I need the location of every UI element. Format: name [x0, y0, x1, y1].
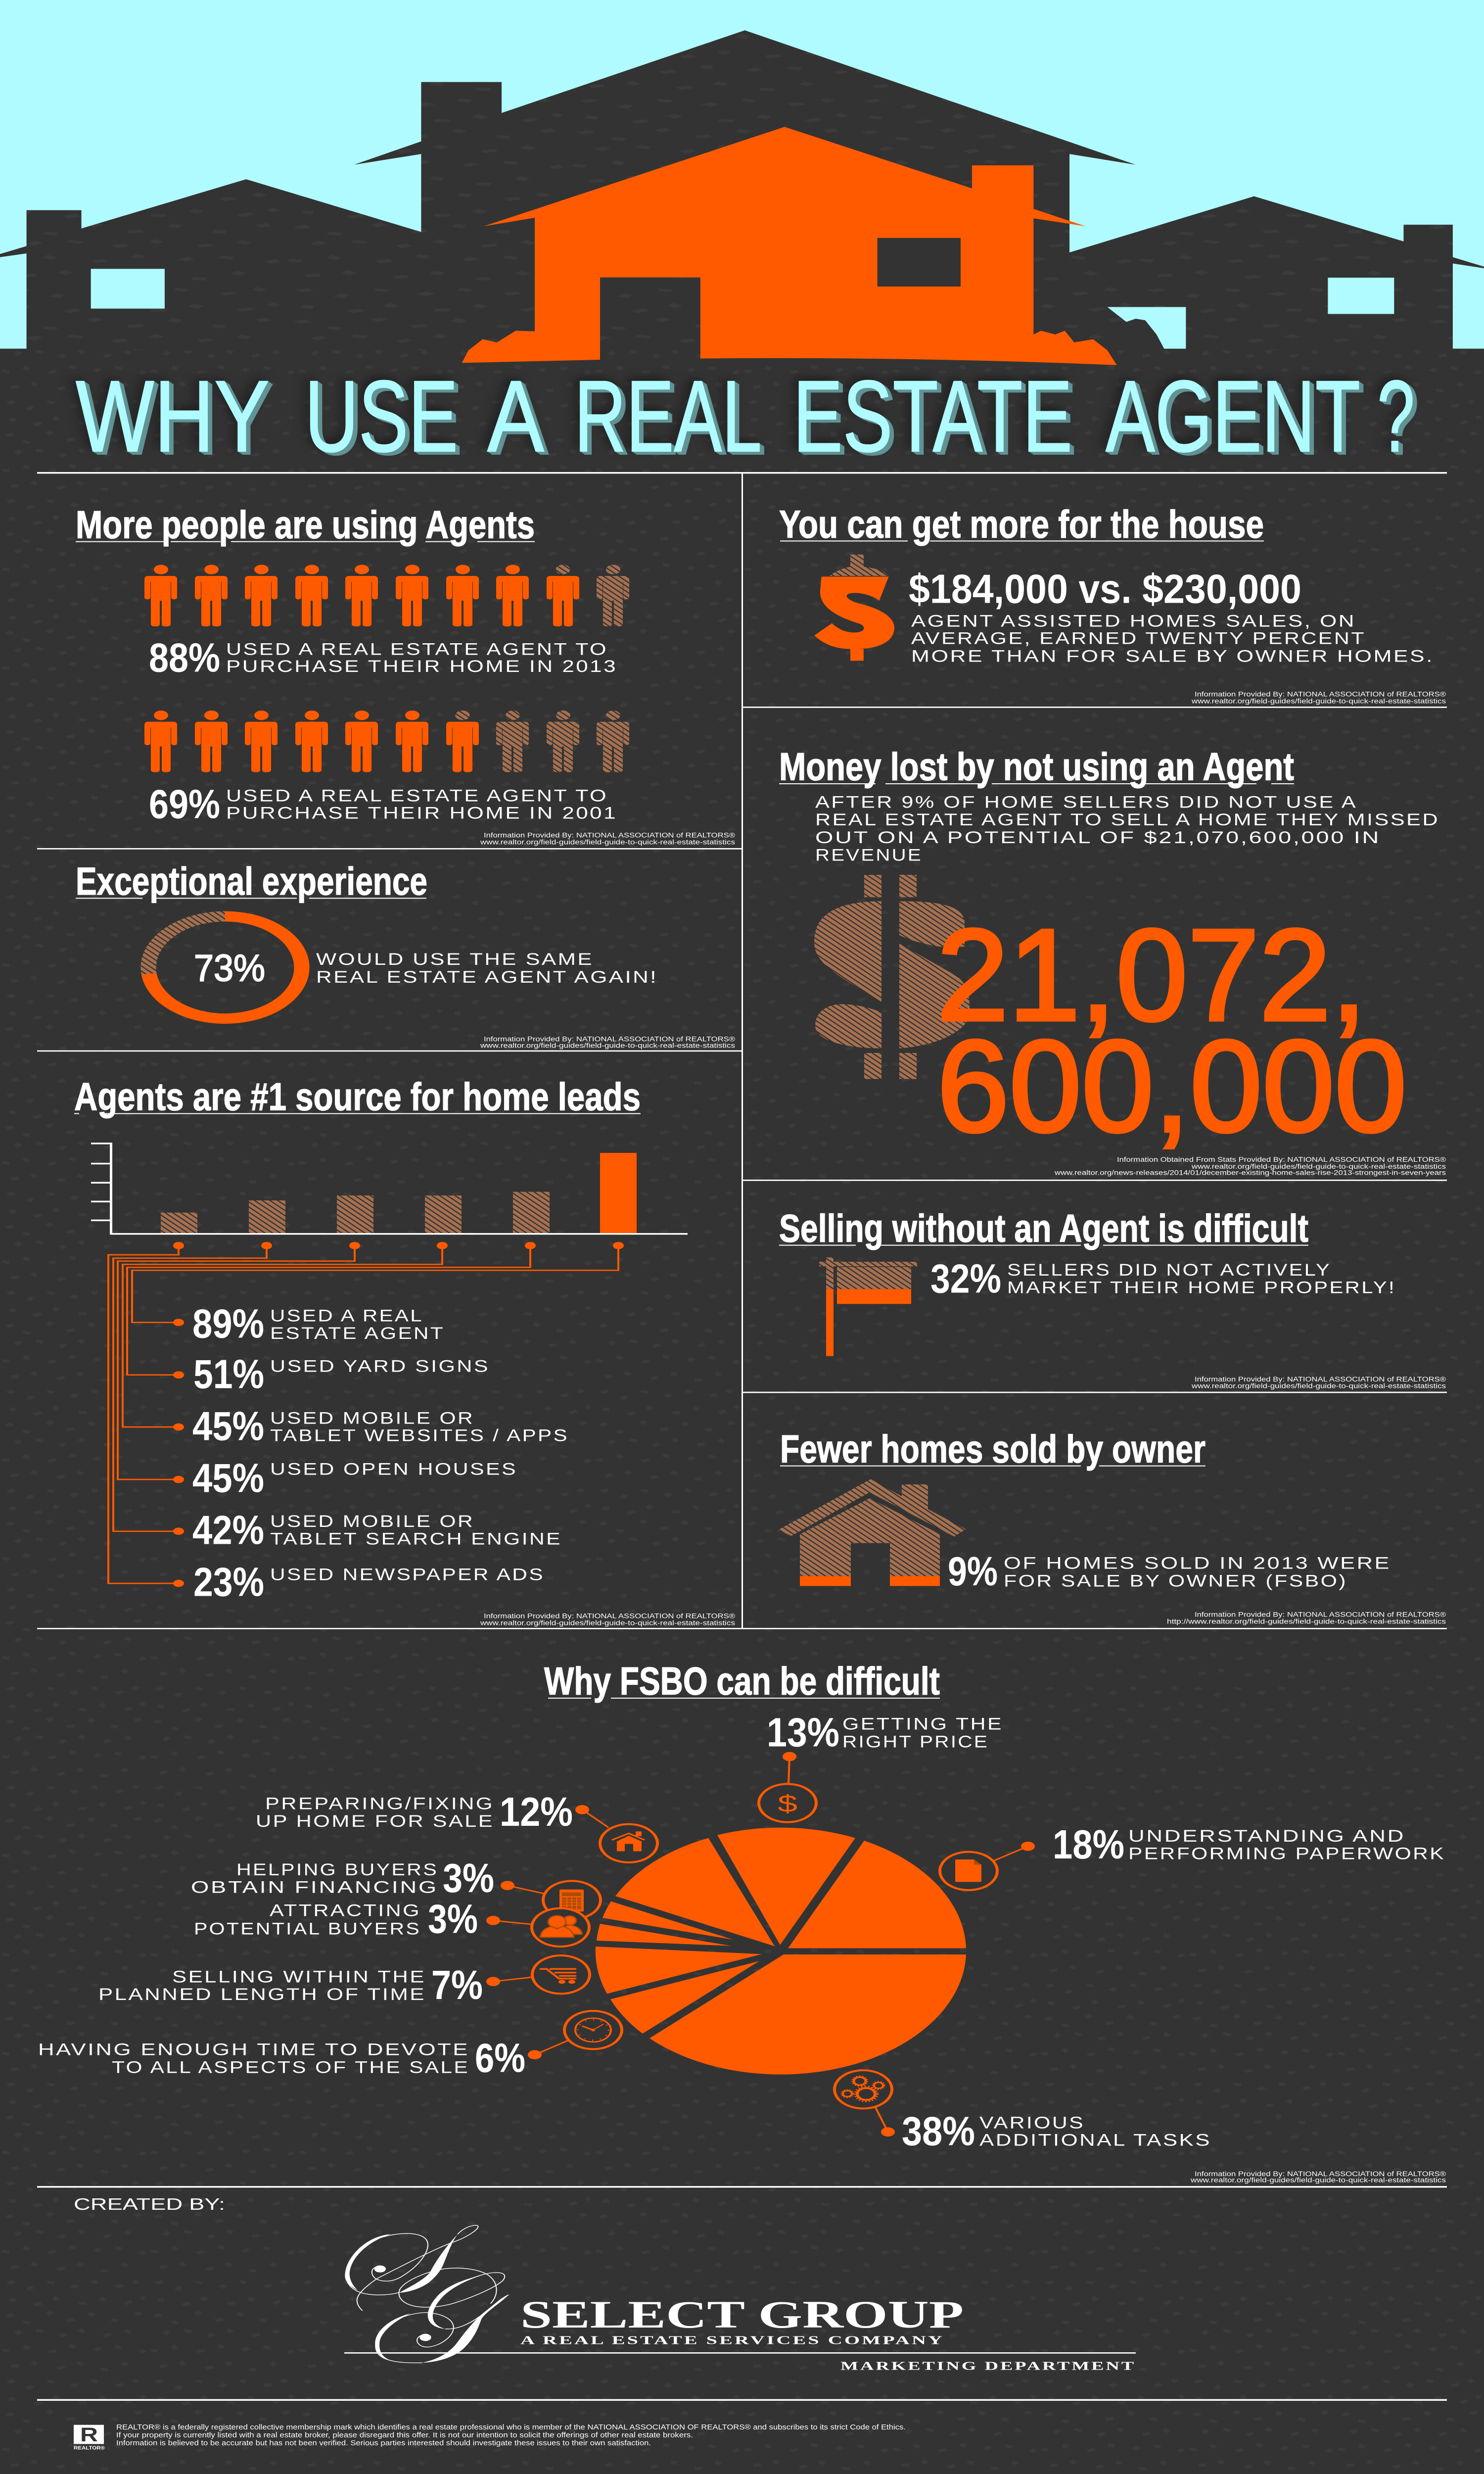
logo: select group	[344, 2225, 1136, 2373]
callout: people icon	[486, 1908, 589, 1947]
label: 7 percent: SELLING WITHIN THE	[172, 1967, 426, 1987]
source note: Information Provided By: NATIONAL ASSOCIATION of REALTORS®	[484, 831, 735, 839]
stat: 23 percent: USED NEWSPAPER ADS	[270, 1565, 545, 1584]
label: 18 percent: 18%	[1053, 1822, 1124, 1867]
stat: 9 percent: 9%	[948, 1549, 998, 1594]
icon: large hatched dollar sign	[814, 875, 970, 1079]
donut chart 73 percent: 73%	[194, 947, 265, 989]
stat: 69 percent	[149, 782, 617, 827]
donut caption: WOULD USE THE SAME	[316, 950, 594, 969]
stat: 32 percent	[930, 1256, 1396, 1302]
title	[76, 360, 1415, 473]
stat: 69 percent: USED A REAL ESTATE AGENT TO	[226, 786, 608, 805]
heading: More people are using Agents	[76, 503, 535, 547]
stat: 89 percent: 89%	[192, 1301, 264, 1346]
price comparison	[909, 567, 1434, 666]
price comparison: AGENT ASSISTED HOMES SALES, ON	[911, 612, 1356, 631]
label: 12 percent	[256, 1789, 573, 1835]
stat: 32 percent: MARKET THEIR HOME PROPERLY!	[1007, 1278, 1396, 1297]
title: ESTATE	[793, 360, 1072, 473]
panel: why fsbo can be difficult	[38, 1660, 1446, 2184]
stat: 88 percent	[149, 635, 617, 680]
stat: 69 percent: 69%	[149, 782, 220, 827]
label: 3 percent financing	[191, 1856, 494, 1901]
stat: 51 percent: 51%	[193, 1352, 264, 1397]
stat: 32 percent: SELLERS DID NOT ACTIVELY	[1007, 1260, 1331, 1280]
label: 38 percent: VARIOUS	[979, 2113, 1085, 2132]
source note: www.realtor.org/field-guides/field-guide-to-quick-real-estate-statistics	[480, 1042, 735, 1049]
label: 13 percent	[767, 1710, 1003, 1755]
source note	[480, 831, 735, 846]
description: OUT ON A POTENTIAL OF $21,070,600,000 IN	[815, 828, 1381, 847]
label: 3 percent financing: HELPING BUYERS	[236, 1860, 438, 1879]
stat: 42 percent: 42%	[192, 1508, 264, 1553]
stat: 51 percent	[193, 1352, 490, 1397]
panel: money lost by not using an agent	[779, 745, 1446, 1177]
source note	[1191, 690, 1446, 705]
stat: 45 percent mobile websites: 45%	[192, 1404, 264, 1449]
label: 13 percent: GETTING THE	[842, 1714, 1003, 1733]
stat: 51 percent: USED YARD SIGNS	[270, 1357, 490, 1376]
title: A	[487, 360, 545, 473]
label: 6 percent: HAVING ENOUGH TIME TO DEVOTE	[38, 2040, 469, 2059]
stat: 23 percent	[193, 1560, 545, 1605]
stat: 88 percent: USED A REAL ESTATE AGENT TO	[226, 640, 608, 659]
price comparison: AVERAGE, EARNED TWENTY PERCENT	[911, 629, 1366, 648]
donut chart 73 percent	[148, 916, 302, 1019]
icon: dollar sign	[814, 555, 894, 661]
label: 38 percent: 38%	[902, 2109, 975, 2154]
stat: 69 percent: PURCHASE THEIR HOME IN 2001	[226, 804, 617, 823]
credit: created by: CREATED BY:	[74, 2195, 225, 2214]
stat: 42 percent: USED MOBILE OR	[270, 1512, 474, 1531]
panel: you can get more for the house	[779, 503, 1446, 705]
source note	[480, 1035, 735, 1049]
panel: selling without an agent is difficult	[779, 1207, 1446, 1389]
legal disclaimer: Information is believed to be accurate but has not been verified. Serious parties interested should investigate these issues to their own satisfaction.	[116, 2439, 651, 2447]
stat: 45 percent mobile websites	[192, 1404, 569, 1449]
legal disclaimer	[116, 2423, 906, 2447]
callout: clock icon	[528, 2011, 622, 2059]
label: 18 percent: UNDERSTANDING AND	[1128, 1826, 1405, 1846]
source note: www.realtor.org/field-guides/field-guide-to-quick-real-estate-statistics	[480, 1619, 735, 1627]
heading: Agents are #1 source for home leads	[74, 1075, 641, 1119]
label: 12 percent: UP HOME FOR SALE	[256, 1811, 494, 1831]
heading: Why FSBO can be difficult	[544, 1660, 940, 1703]
tagline: A REAL ESTATE SERVICES COMPANY	[520, 2333, 944, 2347]
label: 7 percent: 7%	[431, 1962, 483, 2008]
panel: more people are using agents	[76, 503, 735, 846]
callout: document icon	[940, 1842, 1035, 1890]
source note: Information Provided By: NATIONAL ASSOCIATION of REALTORS®	[484, 1612, 735, 1620]
label: 6 percent: TO ALL ASPECTS OF THE SALE	[112, 2058, 469, 2077]
callout: gears icon	[835, 2070, 895, 2137]
label: 6 percent	[38, 2036, 525, 2081]
stat: 89 percent: USED A REAL	[270, 1306, 423, 1326]
connector lines	[108, 1242, 624, 1587]
text: ?	[1377, 360, 1415, 473]
description: REVENUE	[815, 846, 923, 864]
big number	[937, 903, 1407, 1159]
icon: script monogram	[345, 2225, 509, 2363]
source note	[1167, 1611, 1446, 1625]
label: 7 percent: PLANNED LENGTH OF TIME	[98, 1985, 426, 2004]
label: 13 percent: RIGHT PRICE	[842, 1732, 989, 1751]
stat: 89 percent	[192, 1301, 445, 1346]
realtor logo: REALTOR®	[74, 2445, 105, 2451]
panel: fewer homes sold by owner	[778, 1427, 1446, 1625]
source note: Information Provided By: NATIONAL ASSOCIATION of REALTORS®	[484, 1035, 735, 1043]
house windows and sky gaps	[91, 269, 1394, 349]
label: 3 percent attracting buyers: POTENTIAL BUYERS	[194, 1919, 421, 1938]
description: AFTER 9% OF HOME SELLERS DID NOT USE A	[815, 793, 1357, 812]
label: 13 percent: 13%	[767, 1710, 839, 1755]
callout: calculator icon	[501, 1881, 601, 1919]
stat: 45 percent mobile websites: USED MOBILE OR	[270, 1409, 474, 1427]
people icons 88 percent	[144, 565, 629, 626]
title: REAL	[574, 360, 762, 473]
label: 38 percent	[902, 2109, 1211, 2154]
stat: 9 percent: OF HOMES SOLD IN 2013 WERE	[1004, 1554, 1391, 1573]
source note	[480, 1612, 735, 1627]
callout: dollar icon	[759, 1752, 816, 1822]
stat: 89 percent: ESTATE AGENT	[270, 1324, 445, 1343]
department: MARKETING DEPARTMENT	[840, 2359, 1136, 2373]
label: 18 percent	[1053, 1822, 1445, 1867]
donut caption	[316, 950, 658, 987]
description	[815, 793, 1439, 864]
stat: 9 percent	[948, 1549, 1391, 1594]
source note	[1191, 1375, 1446, 1389]
orange house	[462, 127, 1117, 365]
people icons 69 percent	[144, 711, 629, 772]
panel: agents are number one source for home leads	[74, 1075, 735, 1627]
stat: 45 percent open houses: USED OPEN HOUSES	[270, 1460, 517, 1479]
callout: cart icon	[486, 1955, 590, 1994]
stat: 45 percent open houses	[192, 1456, 517, 1501]
realtor logo: R	[80, 2424, 98, 2446]
stat: 42 percent	[192, 1508, 562, 1553]
company name: SELECT GROUP	[520, 2293, 964, 2336]
logo rule	[344, 2352, 1136, 2354]
label: 3 percent attracting buyers: 3%	[428, 1897, 478, 1942]
legal disclaimer: If your property is currently listed with a real estate broker, please disregard this offer. It is not our intention to solicit the offerings of other real estate brokers.	[116, 2431, 693, 2439]
stat: 23 percent: 23%	[193, 1560, 264, 1605]
stat: 32 percent: 32%	[930, 1256, 1001, 1302]
realtor logo	[74, 2424, 105, 2451]
sky background	[0, 0, 1484, 363]
panel: exceptional experience	[76, 859, 735, 1049]
label: 6 percent: 6%	[475, 2036, 525, 2081]
label: 7 percent	[98, 1962, 483, 2008]
stat: 45 percent open houses: 45%	[192, 1456, 264, 1501]
label: 12 percent: PREPARING/FIXING	[265, 1794, 494, 1813]
title: WHY	[76, 360, 270, 473]
stat: 88 percent: 88%	[149, 635, 220, 680]
heading: Exceptional experience	[76, 859, 427, 903]
label: 12 percent: 12%	[500, 1789, 573, 1835]
stat: 88 percent: PURCHASE THEIR HOME IN 2013	[226, 657, 617, 676]
donut caption: REAL ESTATE AGENT AGAIN!	[316, 967, 658, 987]
source note	[1190, 2170, 1446, 2184]
bar chart	[91, 1142, 688, 1235]
icon: for sale sign	[819, 1257, 917, 1356]
label: 3 percent financing: 3%	[443, 1856, 494, 1901]
legal disclaimer: REALTOR® is a federally registered collective membership mark which identifies a real estate professional who is member of the NATIONAL ASSOCIATION OF REALTORS® and subscribes to its strict Code of Ethics.	[116, 2423, 906, 2431]
label: 3 percent attracting buyers: ATTRACTING	[270, 1901, 421, 1920]
pie chart	[596, 1828, 966, 2075]
label: 3 percent financing: OBTAIN FINANCING	[191, 1878, 438, 1897]
stat: 45 percent mobile websites: TABLET WEBSITES / APPS	[270, 1426, 569, 1445]
callout: dollar icon: $	[778, 1790, 797, 1817]
stat: 42 percent: TABLET SEARCH ENGINE	[270, 1529, 562, 1548]
label: 3 percent attracting buyers	[194, 1897, 478, 1942]
source note: www.realtor.org/field-guides/field-guide-to-quick-real-estate-statistics	[480, 838, 735, 846]
icon: house	[778, 1479, 966, 1586]
stat: 9 percent: FOR SALE BY OWNER (FSBO)	[1004, 1571, 1347, 1591]
callout: home icon	[575, 1805, 657, 1862]
label: 38 percent: ADDITIONAL TASKS	[979, 2131, 1211, 2150]
source note	[1054, 1155, 1446, 1177]
title: USE	[305, 360, 458, 473]
